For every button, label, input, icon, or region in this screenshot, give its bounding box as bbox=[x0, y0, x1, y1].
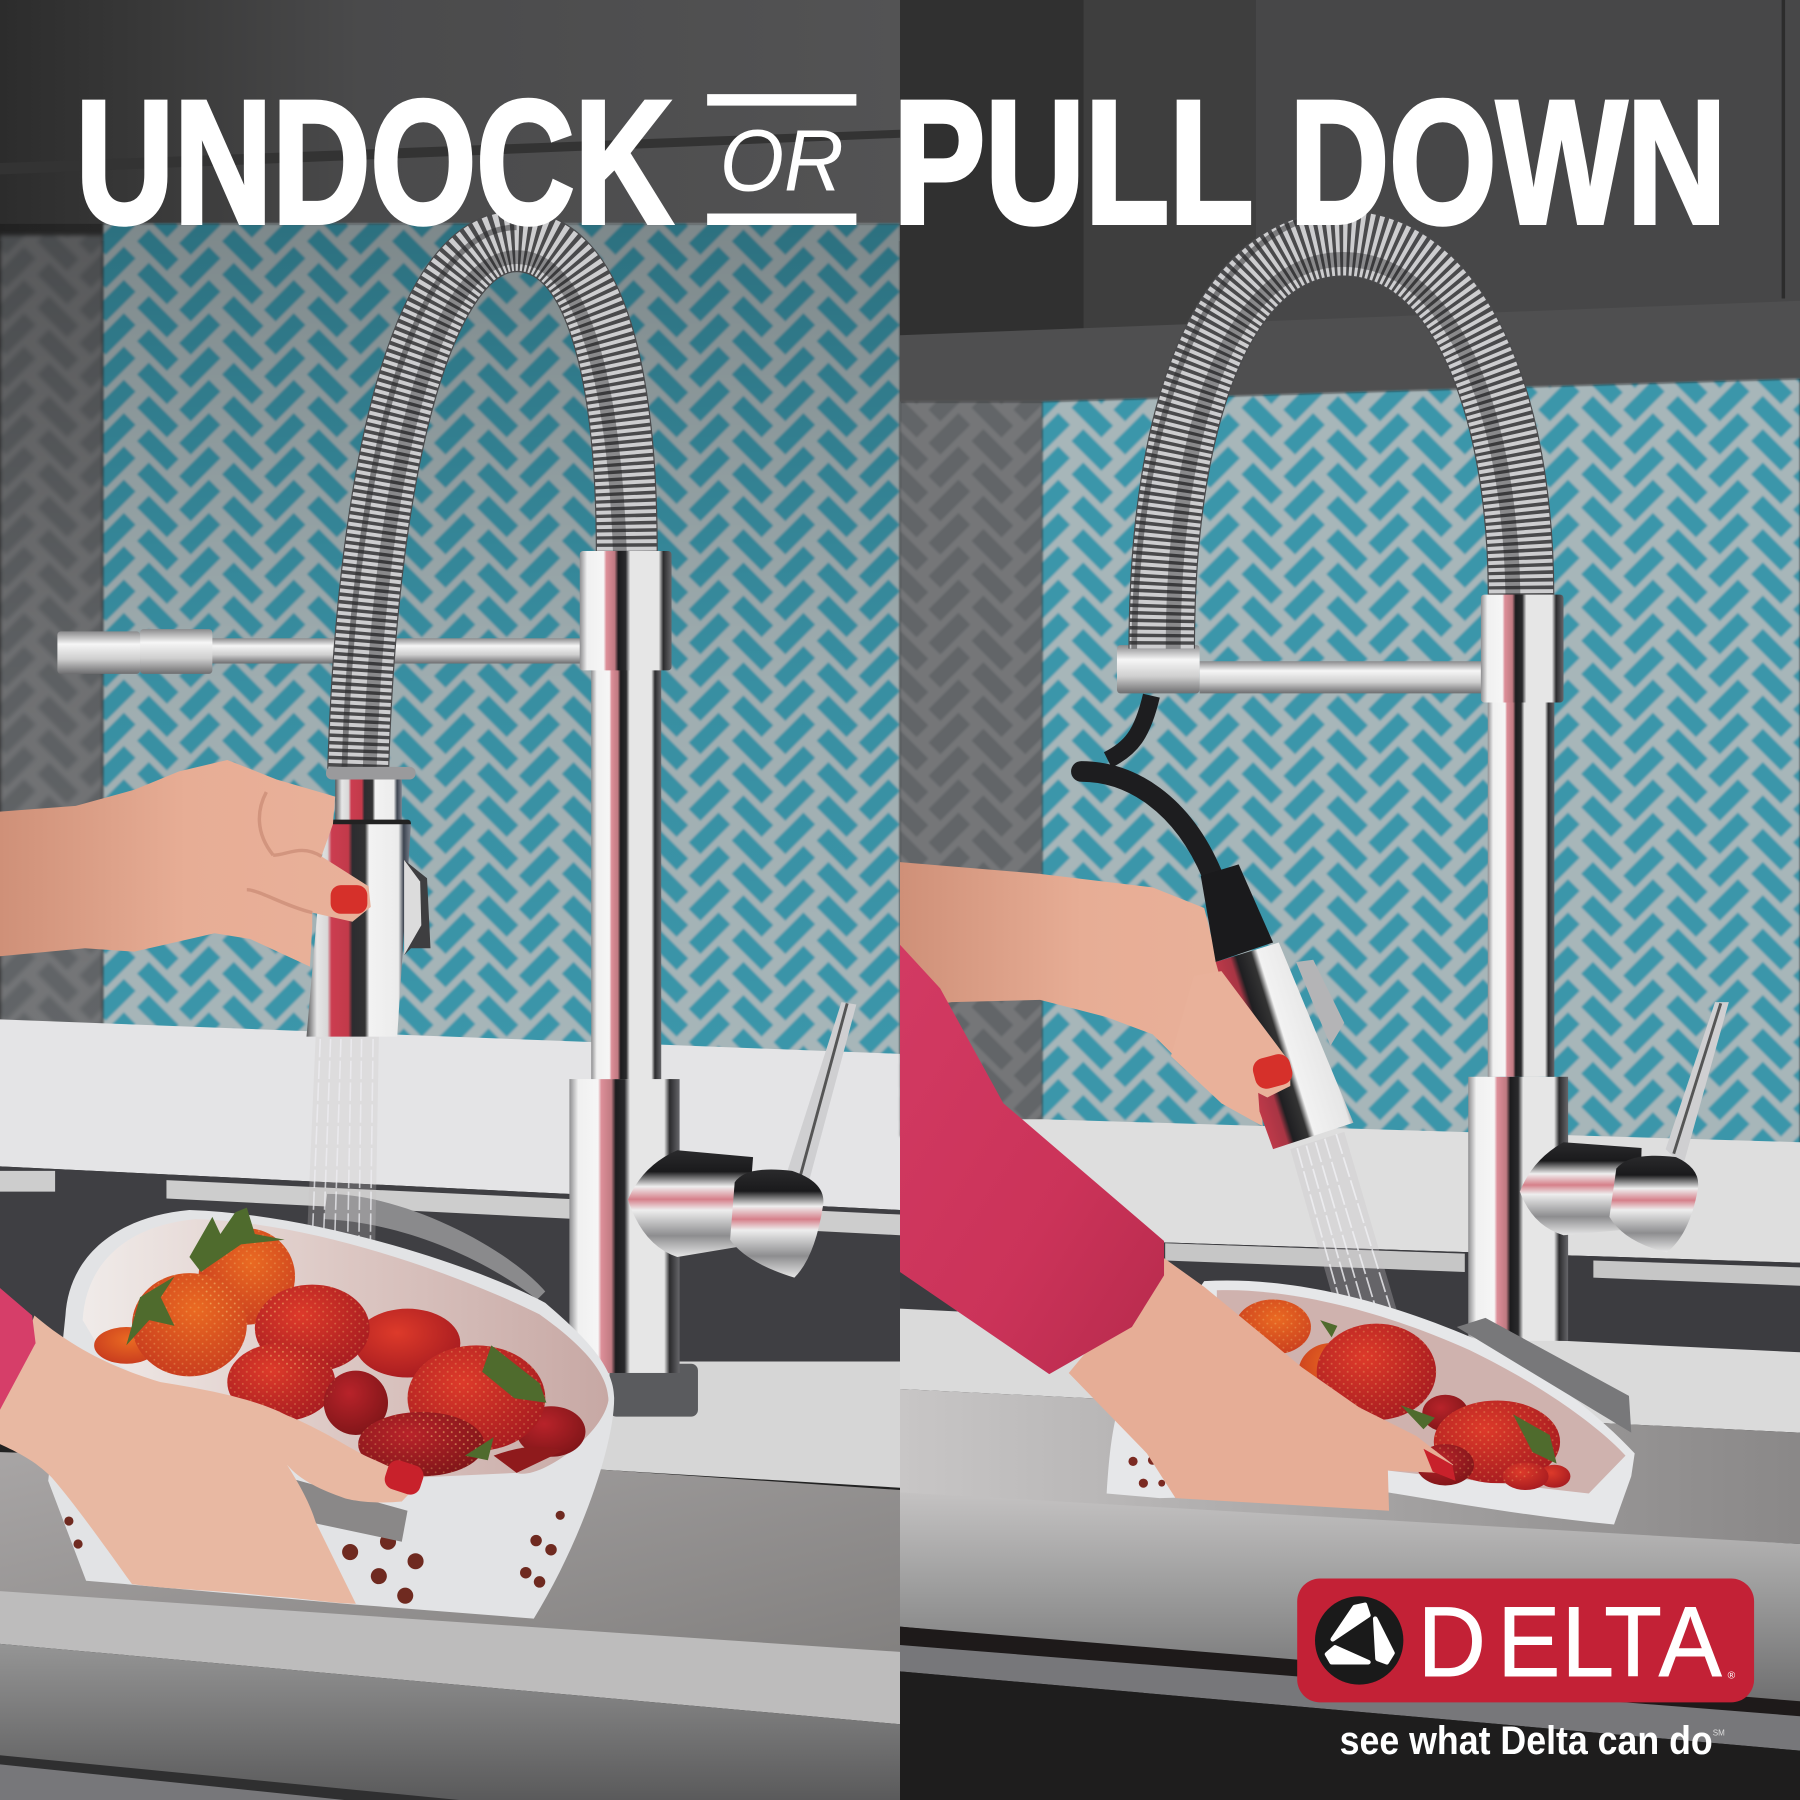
faucet column bbox=[591, 669, 661, 1079]
teal herringbone backsplash bbox=[1042, 379, 1800, 1148]
or separator bbox=[707, 94, 856, 225]
front counter face bbox=[0, 1644, 900, 1800]
sleeve bbox=[900, 945, 1164, 1374]
icon: colander handle back bbox=[324, 1194, 545, 1299]
upper hand bbox=[900, 862, 1263, 1126]
handle cup bbox=[1609, 1156, 1698, 1252]
back counter bbox=[0, 1019, 900, 1210]
lower cabinets bbox=[0, 1166, 900, 1378]
collar bbox=[1481, 595, 1564, 703]
upper cabinets bbox=[0, 0, 900, 241]
upper hand bbox=[0, 760, 371, 967]
icon: faucet with spring coil, docked sprayer removed bbox=[57, 227, 856, 1417]
coil spring bbox=[1134, 214, 1521, 649]
faucet column bbox=[1488, 700, 1554, 1077]
lever bbox=[1666, 1002, 1729, 1166]
wordmark: DELTA bbox=[1418, 1586, 1722, 1698]
hood band bbox=[900, 301, 1800, 402]
strawberry leaves bbox=[1320, 1320, 1557, 1464]
strawberries bbox=[1235, 1299, 1570, 1490]
forearm and lower hand bbox=[1069, 1258, 1456, 1511]
front counter top bbox=[0, 1591, 900, 1724]
dark slit bbox=[900, 1627, 1800, 1716]
strawberry leaves bbox=[126, 1208, 546, 1460]
icon: colander with strawberries bbox=[48, 1208, 614, 1619]
lower dark cabinet bbox=[900, 1671, 1800, 1800]
panel: right photo, pull down bbox=[900, 0, 1800, 1800]
water stream bbox=[304, 1037, 379, 1303]
registered mark: ® bbox=[1728, 1670, 1736, 1681]
side wall tile bbox=[0, 235, 103, 1027]
colander interior bbox=[1217, 1290, 1626, 1493]
handle body bbox=[1520, 1142, 1642, 1235]
front band bbox=[900, 1645, 1800, 1751]
collar bbox=[580, 551, 672, 670]
colander handle bbox=[1457, 1318, 1631, 1433]
arm bbox=[1200, 661, 1507, 693]
colander outer bbox=[48, 1210, 614, 1619]
panel: left photo, undock bbox=[0, 0, 900, 1800]
colander interior bbox=[83, 1219, 608, 1477]
water stream bbox=[1290, 1132, 1405, 1390]
logo: Delta bbox=[1297, 1578, 1754, 1702]
icon: colander with strawberries bbox=[1107, 1280, 1635, 1524]
arm bbox=[138, 638, 591, 664]
heading: undock: UNDOCK bbox=[76, 65, 673, 261]
cabinet handles bbox=[1165, 1243, 1800, 1286]
colander holes bbox=[1128, 1456, 1165, 1488]
tagline: see what Delta can do bbox=[1340, 1718, 1713, 1763]
trigger button bbox=[404, 860, 430, 955]
nail bbox=[1250, 1052, 1295, 1091]
faucet base bbox=[1468, 1077, 1568, 1341]
icon: faucet with detached hose bbox=[1081, 214, 1729, 1341]
lower hand bbox=[0, 1288, 426, 1604]
nail bbox=[382, 1458, 426, 1497]
lower cabinets bbox=[900, 1234, 1800, 1366]
finger over sprayer bbox=[1171, 971, 1295, 1125]
lever bbox=[786, 1002, 856, 1180]
title bbox=[76, 65, 1727, 261]
sleeve bbox=[0, 1288, 36, 1410]
hose bbox=[1108, 696, 1151, 760]
service mark: SM bbox=[1713, 1729, 1725, 1738]
icon: sprayer head bbox=[307, 767, 430, 1037]
metal handle bbox=[287, 1477, 408, 1542]
handle cup bbox=[730, 1169, 823, 1278]
colander holes bbox=[64, 1511, 565, 1604]
cabinet handles bbox=[0, 1171, 900, 1235]
sink ledge bbox=[900, 1309, 1800, 1433]
coil spring bbox=[344, 227, 627, 771]
or separator: OR bbox=[720, 113, 844, 210]
upper cabinets bbox=[900, 0, 1800, 344]
sink basin bbox=[900, 1389, 1800, 1544]
back counter bbox=[900, 1119, 1800, 1263]
strawberries bbox=[94, 1228, 585, 1476]
side wall tile bbox=[900, 402, 1042, 1136]
colander outer bbox=[1107, 1280, 1635, 1524]
sink basin bbox=[0, 1452, 900, 1659]
nail bbox=[331, 885, 367, 914]
icon: sprayer head bbox=[1201, 864, 1353, 1149]
handle body bbox=[628, 1150, 753, 1257]
sink ledge bbox=[597, 1361, 900, 1488]
icon: Delta triangle mark bbox=[1315, 1596, 1403, 1685]
nail bbox=[1423, 1449, 1456, 1481]
front counter top bbox=[900, 1492, 1800, 1710]
teal herringbone backsplash bbox=[103, 224, 900, 1056]
faucet base bbox=[610, 1364, 698, 1417]
